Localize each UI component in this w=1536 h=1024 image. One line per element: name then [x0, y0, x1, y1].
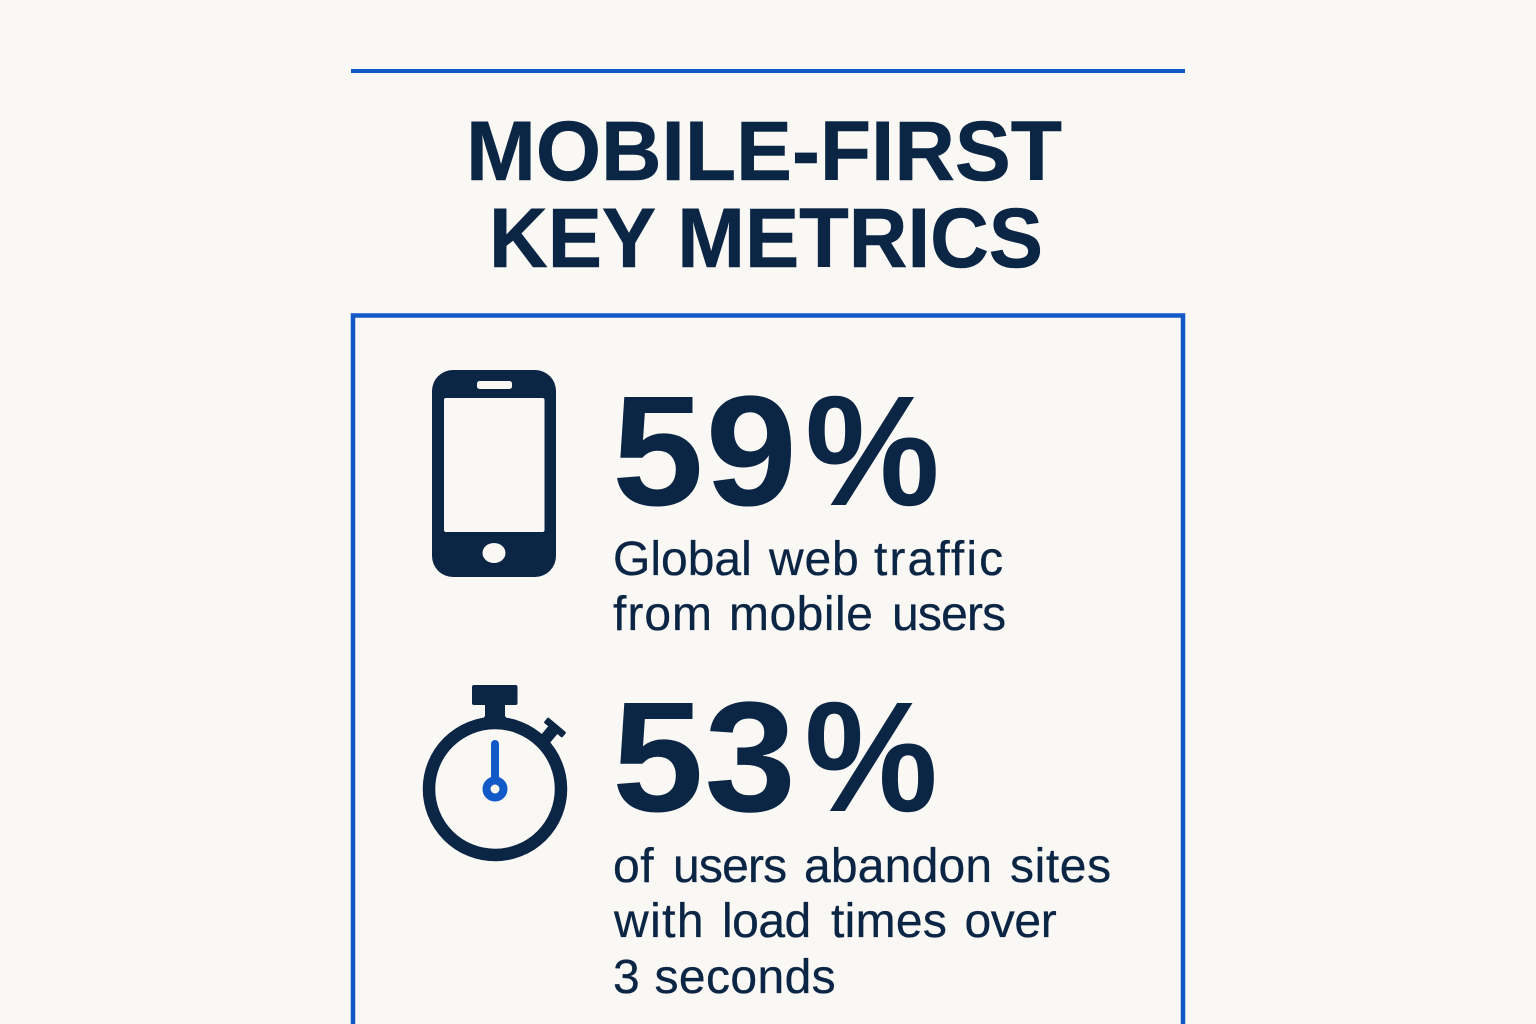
metric: load abandonment — [429, 669, 1112, 1004]
description: mobile traffic: Global — [613, 533, 752, 586]
description: load abandonment: seconds — [654, 951, 836, 1004]
icon: smartphone — [432, 370, 556, 577]
stat: 53%: 53 — [612, 670, 796, 845]
description: load abandonment — [613, 840, 1112, 1004]
title: KEY METRICS — [489, 191, 1043, 285]
metric: mobile traffic — [432, 363, 1005, 641]
top rule — [351, 69, 1185, 73]
stat: 59%: 59 — [612, 364, 797, 539]
description: mobile traffic: web — [768, 533, 859, 586]
description: mobile traffic: traffic — [874, 533, 1005, 586]
panel border — [353, 316, 1183, 1024]
description: mobile traffic: users — [892, 588, 1005, 641]
stat: 53%: % — [804, 669, 938, 845]
stat: 59% — [612, 363, 940, 539]
panel: metrics — [353, 316, 1183, 1024]
title — [466, 104, 1062, 285]
title: MOBILE-FIRST — [466, 104, 1062, 198]
description: load abandonment: sites — [1010, 840, 1112, 893]
description: mobile traffic: mobile — [729, 588, 873, 641]
stat: 59%: % — [805, 363, 940, 539]
description: load abandonment: abandon — [804, 840, 992, 893]
description: load abandonment: times — [831, 895, 947, 948]
description: load abandonment: of — [613, 840, 654, 893]
description: load abandonment: load — [722, 895, 811, 948]
description: load abandonment: users — [673, 840, 786, 893]
stat: 53% — [612, 669, 938, 845]
description: mobile traffic — [613, 533, 1005, 641]
description: load abandonment: 3 — [613, 951, 640, 1004]
description: mobile traffic: from — [613, 588, 713, 641]
description: load abandonment: with — [613, 895, 705, 948]
description: load abandonment: over — [964, 895, 1057, 948]
icon: stopwatch — [429, 685, 566, 855]
